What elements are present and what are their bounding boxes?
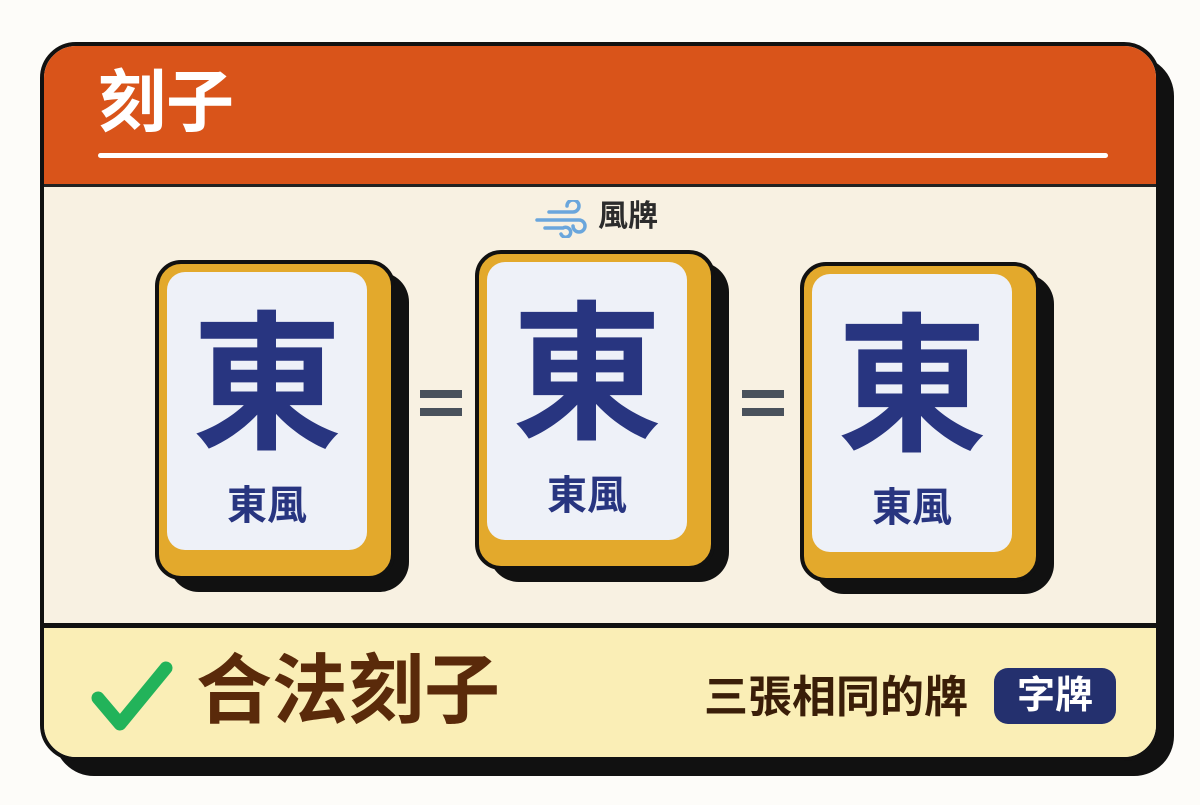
badge: 字牌 xyxy=(994,668,1116,724)
equals sign 2 xyxy=(742,390,784,416)
equals sign 1 xyxy=(420,390,462,416)
footer xyxy=(44,623,1156,762)
badge: 字牌: 字牌 xyxy=(1017,675,1093,717)
tile 1: 東 xyxy=(192,301,342,469)
title: 刻子 xyxy=(98,65,234,141)
tile 1 xyxy=(155,260,409,592)
tile 1: 東風 xyxy=(227,484,307,528)
tile 2 xyxy=(475,250,729,582)
tile 3 xyxy=(800,262,1054,594)
tile 2: 東 xyxy=(512,291,662,459)
tile 3: 東風 xyxy=(872,486,952,530)
footer description: 三張相同的牌 xyxy=(704,673,968,722)
icon: wind xyxy=(535,200,587,238)
category label: wind tiles: 風牌 xyxy=(598,200,658,233)
header xyxy=(44,46,1156,187)
title underline xyxy=(98,153,1108,158)
icon: check mark xyxy=(92,662,172,730)
category label: wind tiles xyxy=(535,200,658,238)
tile 3: 東 xyxy=(837,303,987,471)
tile 2: 東風 xyxy=(547,474,627,518)
footer heading: 合法刻子 xyxy=(196,649,500,734)
